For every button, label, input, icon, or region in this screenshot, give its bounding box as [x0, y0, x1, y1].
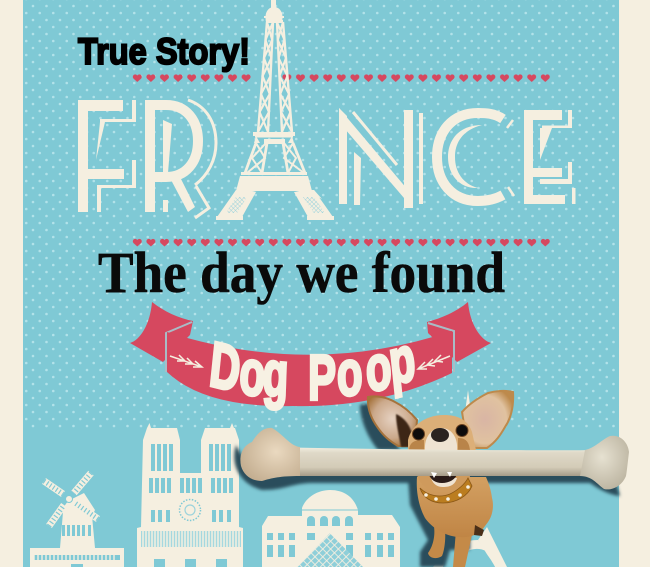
dog nose [431, 428, 449, 442]
ribbon left tail [130, 302, 193, 362]
dog right ear [462, 391, 513, 448]
dog body [417, 477, 493, 537]
dog muzzle [425, 428, 457, 450]
ribbon centre band [167, 331, 452, 406]
dog chin [431, 478, 457, 487]
ribbon right arrow [418, 355, 450, 369]
letter F [78, 100, 136, 212]
title word FRANCE in art deco letters [78, 100, 576, 218]
ribbon text Dog Poop: Dog Poop [207, 323, 418, 413]
small Eiffel Tower behind the dog [433, 390, 507, 567]
lower lattice legs [245, 143, 305, 173]
bone right knob [580, 436, 629, 489]
bone shadow [234, 445, 620, 496]
dog left ear [368, 396, 417, 446]
dog head [408, 415, 476, 450]
chihuahua dog [368, 391, 513, 567]
upper lattice legs [258, 22, 292, 132]
upper row of hearts [130, 72, 552, 84]
dog collar [420, 478, 472, 503]
dog cheek shading [409, 438, 470, 450]
letter R [145, 100, 216, 218]
dog teeth [431, 472, 452, 478]
dog right eye [456, 424, 468, 436]
letter N [339, 108, 423, 208]
dog left eye [412, 428, 424, 440]
left foot [216, 190, 256, 220]
Eiffel Tower forming the letter A [216, 0, 334, 220]
first platform and arch [230, 172, 322, 200]
Notre-Dame cathedral [137, 423, 243, 567]
dog left ear shadow detail [396, 414, 412, 447]
bone shaft [270, 447, 600, 476]
dog bone [240, 428, 629, 489]
ribbon right tail [427, 302, 491, 362]
windmill [30, 473, 124, 567]
heading: True Story: True Story! [78, 31, 250, 72]
lower row of hearts [130, 236, 552, 248]
letter C [437, 113, 514, 201]
tower spire and top [264, 0, 284, 23]
dog shadow [360, 404, 470, 567]
red ribbon banner [130, 302, 491, 413]
dog legs [428, 522, 473, 567]
polka dot pattern [23, 0, 619, 430]
dog lower jaw [417, 475, 470, 492]
ribbon left arrow [170, 355, 202, 367]
heading: The day we found: The day we found [98, 240, 505, 305]
Paris skyline [30, 390, 629, 567]
bone left knob [240, 428, 300, 481]
dog mouth [428, 473, 458, 483]
dog raised paw [474, 525, 484, 536]
ribbon fold lines [166, 322, 454, 372]
Louvre glass pyramid [297, 533, 363, 567]
letter E [524, 110, 576, 204]
Louvre palace [262, 490, 400, 567]
right foot [294, 190, 334, 220]
second platform [253, 132, 295, 144]
